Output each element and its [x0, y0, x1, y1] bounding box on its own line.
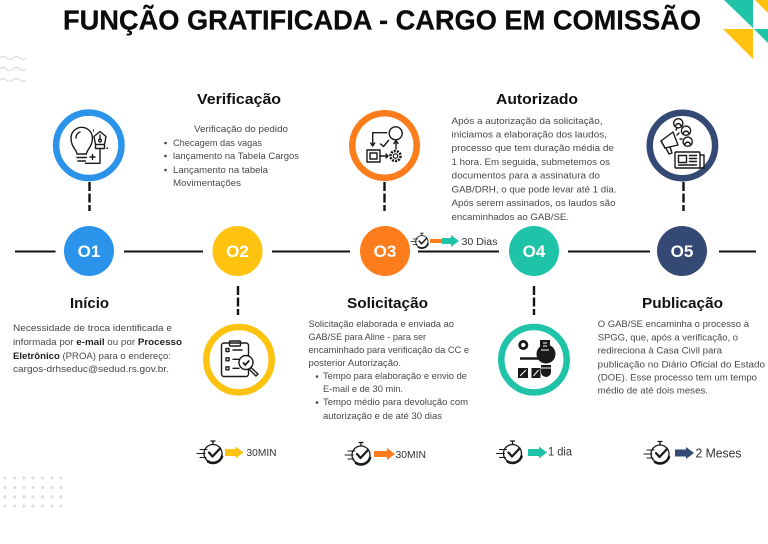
text block: E-mail e de 30 min. [323, 384, 403, 395]
arrow [374, 448, 395, 460]
number badge: O3 [374, 242, 396, 261]
text block [308, 319, 469, 422]
text block: GAB/SE para Aline - para ser [308, 332, 426, 343]
panel: step 04 autorizado [452, 91, 616, 463]
text block: Necessidade de troca identificada e [13, 323, 172, 334]
text block [13, 323, 182, 375]
text block: posterior Autorização. [308, 358, 401, 369]
dashed connector [383, 182, 386, 211]
duration: 1 dia [496, 441, 572, 463]
duration label: 2 Meses [696, 446, 742, 460]
duration label: 1 dia [548, 444, 572, 458]
text block: Após serem assinados, os laudos são [452, 198, 616, 209]
dashed connector [237, 286, 239, 315]
duration label: 30MIN [246, 448, 276, 459]
dashed connector [533, 286, 535, 315]
arrow [675, 447, 694, 459]
text block [598, 319, 765, 396]
icon: small stopwatch [411, 233, 428, 248]
text block: processo que tem duração média de [452, 143, 614, 154]
icon: stopwatch [644, 442, 669, 463]
arrow [430, 235, 459, 247]
arrow [225, 446, 244, 458]
icon: stopwatch [345, 442, 370, 464]
dashed connector [88, 182, 91, 211]
text block [164, 124, 299, 189]
corner triangles [723, 0, 768, 59]
text block: médio de até dois meses. [598, 386, 708, 396]
text block: cargos-drhseduc@sedud.rs.gov.br. [13, 364, 169, 375]
arrow [528, 446, 547, 458]
heading: Autorizado [496, 91, 578, 108]
dashed connector [682, 182, 685, 211]
number badge: O2 [226, 242, 249, 261]
text block: redireciona à Casa Civil para [598, 346, 723, 356]
text block: documentos para a assinatura do [452, 170, 600, 182]
text block: lançamento na Tabela Cargos [173, 151, 299, 162]
text block: O GAB/SE encaminha o processo à [598, 319, 750, 330]
duration: 30 min [345, 442, 426, 464]
title: FUNÇÃO GRATIFICADA - CARGO EM COMISSÃO [63, 4, 701, 36]
panel: step 03 solicitação [308, 113, 498, 464]
icon ring: gear, pencil and bulb [501, 327, 567, 392]
text block: encaminhado para verificação da CC e [308, 345, 469, 356]
number badge: O1 [78, 242, 100, 261]
text block: Tempo para elaboração e envio de [323, 371, 467, 382]
text block: Lançamento na tabela [173, 165, 269, 176]
heading: Verificação [197, 91, 281, 108]
text block: 1 hora. Em seguida, submetemos os [452, 157, 610, 168]
text block: publicação no Diário Oficial do Estado [598, 360, 765, 370]
panel: step 05 publicação [598, 113, 765, 463]
number badge [212, 226, 262, 276]
text block: informada por e-mail ou por Processo [13, 337, 182, 348]
number badge: O4 [523, 242, 546, 261]
heading: Publicação [642, 295, 723, 312]
text block: Verificação do pedido [194, 124, 288, 135]
text block: Solicitação elaborada e enviada ao [308, 319, 454, 330]
panel: step 02 verificação [164, 91, 299, 463]
text block: Após a autorização da solicitação, [452, 116, 602, 127]
text block [452, 116, 616, 223]
number badge [64, 226, 114, 276]
heading: Início [70, 295, 109, 312]
icon ring: process flow [352, 113, 417, 178]
text block: Eletrônico (PROA) para o endereço: [13, 351, 171, 362]
duration: 30 min [197, 441, 276, 463]
text block: encaminhados ao GAB/SE. [452, 212, 569, 223]
text block: GAB/DRH, o que pode levar até 1 dia. [452, 184, 616, 196]
heading: Solicitação [347, 295, 428, 312]
decorative dot grid [3, 476, 63, 508]
panel: step 01 início [13, 113, 182, 375]
duration label: 30 Dias [462, 237, 498, 248]
number badge [360, 226, 410, 276]
number badge [509, 226, 559, 276]
icon: stopwatch [197, 441, 222, 463]
number badge: O5 [671, 242, 693, 261]
duration: 30 dias [411, 233, 498, 248]
text block: (DOE). Esse processo tem um tempo [598, 372, 757, 384]
text block: Checagem das vagas [173, 138, 262, 149]
duration: 2 meses [644, 442, 742, 463]
text block: SPGG, que, após a verificação, o [598, 332, 738, 344]
icon ring: lightbulb and pen [56, 113, 121, 178]
timeline connector lines [15, 250, 756, 252]
decorative waves [0, 56, 26, 82]
number badge [657, 226, 707, 276]
text block: autorização e de até 30 dias [323, 411, 442, 422]
icon: stopwatch [496, 441, 522, 463]
text block: Movimentações [173, 178, 241, 189]
icon ring: checklist with magnifier [206, 327, 272, 392]
text block: iniciamos a elaboração dos laudos, [452, 130, 607, 140]
text block: Tempo médio para devolução com [323, 397, 468, 408]
icon ring: megaphone and newspaper [650, 113, 715, 178]
duration label: 30MIN [396, 450, 426, 461]
